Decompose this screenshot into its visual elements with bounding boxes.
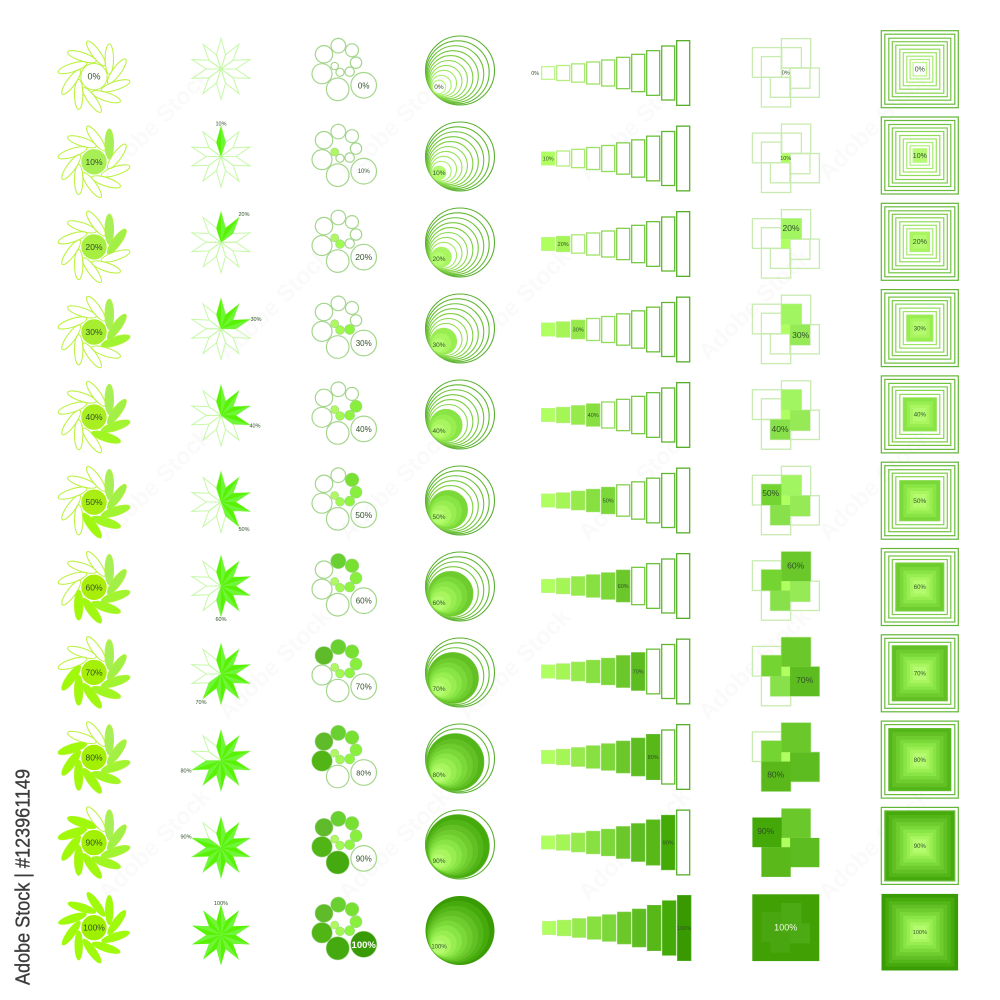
flower gauge 40%: 40% bbox=[85, 412, 103, 422]
nested circles 100%: 100% bbox=[431, 944, 447, 950]
flower gauge 30%: 30% bbox=[85, 327, 103, 337]
squares 40% bbox=[881, 376, 958, 453]
nested circles 0%: 0% bbox=[434, 84, 444, 91]
pinwheel 60% bbox=[752, 552, 819, 620]
pinwheel 0% bbox=[752, 39, 819, 107]
watermark: Adobe Stock bbox=[93, 63, 217, 186]
bubble gauge 60%: 60% bbox=[356, 597, 372, 606]
nested circles 90% bbox=[426, 810, 494, 879]
bars 100% bbox=[543, 896, 691, 960]
nested circles 0% bbox=[426, 36, 494, 105]
flower gauge 80%: 80% bbox=[85, 752, 103, 762]
squares 40%: 40% bbox=[914, 413, 926, 419]
pinwheel 20%: 20% bbox=[782, 223, 800, 233]
watermark: Adobe Stock bbox=[213, 603, 337, 726]
nested circles 80% bbox=[426, 724, 494, 793]
squares 100%: 100% bbox=[913, 930, 927, 936]
nested circles 80%: 80% bbox=[432, 772, 446, 779]
nested circles 70%: 70% bbox=[432, 686, 446, 693]
bars 60%: 60% bbox=[618, 584, 629, 590]
column: pinwheel square gauges bbox=[752, 39, 819, 961]
bubble gauge 20% bbox=[312, 210, 377, 272]
watermark bbox=[93, 63, 937, 906]
bars 0%: 0% bbox=[531, 71, 539, 77]
nested circles 40%: 40% bbox=[432, 428, 446, 435]
bars 80%: 80% bbox=[648, 755, 659, 761]
bars 70% bbox=[542, 639, 690, 704]
flower gauge 20% bbox=[57, 209, 131, 285]
watermark: Adobe Stock bbox=[813, 63, 937, 186]
watermark: Adobe Stock bbox=[213, 243, 337, 366]
pinwheel 70%: 70% bbox=[796, 675, 814, 685]
bars 10% bbox=[542, 126, 690, 191]
star gauge 40%: 40% bbox=[249, 423, 261, 429]
nested circles 50%: 50% bbox=[432, 514, 446, 521]
bubble gauge 40%: 40% bbox=[356, 425, 372, 434]
squares 20% bbox=[881, 203, 958, 280]
flower gauge 70% bbox=[57, 634, 131, 710]
bubble gauge 10% bbox=[312, 124, 377, 186]
bars 10%: 10% bbox=[543, 156, 554, 162]
star gauge 40% bbox=[191, 385, 261, 446]
column: nested circle gauges bbox=[426, 36, 494, 965]
nested circles 40% bbox=[426, 380, 494, 449]
flower gauge 50% bbox=[57, 464, 131, 540]
flower gauge 20%: 20% bbox=[85, 242, 103, 252]
pinwheel 60%: 60% bbox=[787, 560, 805, 570]
column: flower petal gauges bbox=[57, 39, 131, 966]
star gauge 80%: 80% bbox=[180, 768, 192, 774]
star gauge 10%: 10% bbox=[215, 122, 227, 128]
column: bubble gauges bbox=[312, 38, 376, 960]
squares 0%: 0% bbox=[915, 67, 925, 74]
flower gauge 10%: 10% bbox=[85, 157, 103, 167]
nested circles 60%: 60% bbox=[432, 600, 446, 607]
pinwheel 80% bbox=[752, 723, 819, 791]
star gauge 70%: 70% bbox=[195, 700, 207, 706]
squares 100% bbox=[882, 894, 958, 970]
pinwheel 50% bbox=[752, 466, 819, 535]
star gauge 20%: 20% bbox=[238, 212, 250, 218]
star gauge 20% bbox=[191, 212, 251, 273]
bars 90% bbox=[542, 810, 690, 875]
watermark: Adobe Stock bbox=[573, 63, 697, 186]
watermark: Adobe Stock bbox=[693, 603, 817, 726]
column: star gauges bbox=[180, 38, 262, 966]
squares 30%: 30% bbox=[914, 326, 926, 332]
pinwheel 10% bbox=[752, 124, 819, 192]
pinwheel 80%: 80% bbox=[767, 770, 785, 780]
bars 70%: 70% bbox=[633, 670, 644, 676]
bubble gauge 100%: 100% bbox=[352, 940, 376, 951]
flower gauge 30% bbox=[57, 294, 131, 370]
pinwheel 70% bbox=[752, 637, 819, 706]
nested circles 70% bbox=[426, 638, 494, 707]
nested circles 10% bbox=[426, 122, 494, 191]
bars 30% bbox=[542, 297, 690, 362]
flower gauge 60% bbox=[57, 549, 131, 625]
bubble gauge 90% bbox=[312, 812, 377, 874]
pinwheel 40%: 40% bbox=[771, 424, 789, 434]
bars 20% bbox=[542, 212, 690, 276]
star gauge 10% bbox=[191, 122, 251, 187]
squares 80%: 80% bbox=[914, 758, 926, 764]
bars 50%: 50% bbox=[603, 498, 614, 504]
watermark: Adobe Stock bbox=[93, 783, 217, 906]
pinwheel 10%: 10% bbox=[780, 156, 791, 162]
flower gauge 80% bbox=[57, 720, 131, 795]
star gauge 30% bbox=[191, 298, 262, 359]
squares 60% bbox=[881, 548, 958, 626]
bars 30%: 30% bbox=[573, 328, 584, 334]
star gauge 100% bbox=[191, 901, 251, 966]
flower gauge 90% bbox=[57, 805, 131, 881]
bubble gauge 10%: 10% bbox=[358, 169, 370, 175]
pinwheel 50%: 50% bbox=[762, 488, 780, 498]
bubble gauge 100% bbox=[312, 897, 377, 960]
star gauge 60% bbox=[191, 556, 251, 623]
bubble gauge 0% bbox=[312, 38, 377, 101]
bubble gauge 50%: 50% bbox=[355, 510, 373, 520]
watermark: Adobe Stock bbox=[333, 63, 457, 186]
star gauge 0% bbox=[191, 38, 251, 100]
star gauge 50% bbox=[191, 472, 251, 533]
watermark: Adobe Stock bbox=[453, 243, 577, 366]
nested circles 30%: 30% bbox=[432, 342, 446, 349]
flower gauge 50%: 50% bbox=[85, 497, 103, 507]
bubble gauge 30% bbox=[312, 296, 377, 358]
bubble gauge 80%: 80% bbox=[356, 768, 372, 778]
star gauge 50%: 50% bbox=[238, 527, 250, 533]
squares 30% bbox=[881, 290, 958, 367]
bubble gauge 60% bbox=[312, 554, 377, 616]
squares 90%: 90% bbox=[914, 844, 926, 850]
vertical stock id text: Adobe Stock | #123961149 bbox=[12, 769, 34, 985]
bars 40% bbox=[542, 383, 690, 447]
watermark: Adobe Stock bbox=[93, 423, 217, 546]
pinwheel 90%: 90% bbox=[757, 826, 775, 836]
bars 80% bbox=[542, 725, 690, 789]
squares 10% bbox=[881, 117, 958, 194]
nested circles 50% bbox=[426, 466, 494, 535]
bars 0% bbox=[531, 41, 690, 105]
nested circles 100% bbox=[426, 896, 494, 965]
squares 60%: 60% bbox=[914, 585, 926, 591]
flower gauge 0% bbox=[57, 39, 131, 115]
watermark: Adobe Stock bbox=[573, 783, 697, 906]
pinwheel 100%: 100% bbox=[774, 923, 797, 933]
bubble gauge 80% bbox=[312, 726, 377, 788]
bars 100%: 100% bbox=[677, 926, 691, 932]
squares 10%: 10% bbox=[913, 153, 927, 160]
column: growing bar gauges bbox=[531, 41, 691, 960]
bubble gauge 0%: 0% bbox=[358, 81, 369, 90]
bubble gauge 20%: 20% bbox=[355, 252, 373, 262]
watermark: Adobe Stock bbox=[693, 243, 817, 366]
column: concentric square gauges bbox=[881, 31, 958, 970]
bars 20%: 20% bbox=[558, 242, 569, 248]
watermark: Adobe Stock bbox=[453, 603, 577, 726]
watermark: Adobe Stock bbox=[333, 783, 457, 906]
star gauge 80% bbox=[180, 730, 251, 791]
nested circles 20% bbox=[426, 208, 494, 277]
bubble gauge 30%: 30% bbox=[356, 339, 372, 348]
bars 40%: 40% bbox=[588, 413, 599, 419]
squares 20%: 20% bbox=[913, 239, 927, 246]
star gauge 100%: 100% bbox=[214, 901, 228, 907]
star gauge 90% bbox=[180, 817, 251, 878]
nested circles 90%: 90% bbox=[432, 858, 446, 865]
bubble gauge 40% bbox=[312, 382, 377, 444]
squares 0% bbox=[881, 31, 958, 108]
flower gauge 70%: 70% bbox=[85, 667, 103, 677]
star gauge 60%: 60% bbox=[215, 617, 227, 623]
pinwheel 100% bbox=[752, 894, 819, 961]
squares 70% bbox=[881, 635, 958, 712]
star gauge 30%: 30% bbox=[250, 317, 262, 323]
pinwheel 40% bbox=[752, 381, 819, 449]
flower gauge 90%: 90% bbox=[85, 838, 103, 848]
flower gauge 100% bbox=[57, 890, 131, 966]
watermark: Adobe Stock bbox=[333, 423, 457, 546]
squares 50% bbox=[881, 462, 958, 539]
squares 70%: 70% bbox=[914, 671, 926, 677]
nested circles 60% bbox=[426, 552, 494, 621]
pinwheel 0%: 0% bbox=[782, 70, 790, 76]
squares 50%: 50% bbox=[913, 498, 927, 505]
flower gauge 10% bbox=[57, 124, 131, 200]
nested circles 10%: 10% bbox=[432, 170, 446, 177]
star gauge 70% bbox=[191, 644, 251, 706]
squares 90% bbox=[881, 807, 958, 884]
watermark: Adobe Stock bbox=[573, 423, 697, 546]
squares 80% bbox=[881, 721, 958, 798]
bars 60% bbox=[542, 554, 690, 618]
flower gauge 60%: 60% bbox=[85, 582, 103, 592]
flower gauge 100%: 100% bbox=[83, 923, 105, 933]
nested circles 30% bbox=[426, 294, 494, 363]
bars 50% bbox=[542, 468, 690, 533]
bubble gauge 70%: 70% bbox=[356, 683, 372, 692]
bubble gauge 70% bbox=[312, 640, 377, 702]
star gauge 90%: 90% bbox=[180, 834, 192, 840]
flower gauge 40% bbox=[57, 379, 131, 455]
watermark: Adobe Stock bbox=[813, 423, 937, 546]
bubble gauge 90%: 90% bbox=[356, 854, 372, 863]
flower gauge 0%: 0% bbox=[87, 72, 101, 82]
bubble gauge 50% bbox=[312, 468, 377, 530]
watermark: Adobe Stock bbox=[813, 783, 937, 906]
pinwheel 30%: 30% bbox=[792, 330, 810, 340]
pinwheel 90% bbox=[752, 808, 819, 877]
nested circles 20%: 20% bbox=[432, 256, 446, 263]
bars 90%: 90% bbox=[663, 840, 674, 846]
pinwheel 20% bbox=[752, 210, 819, 278]
pinwheel 30% bbox=[752, 295, 819, 364]
